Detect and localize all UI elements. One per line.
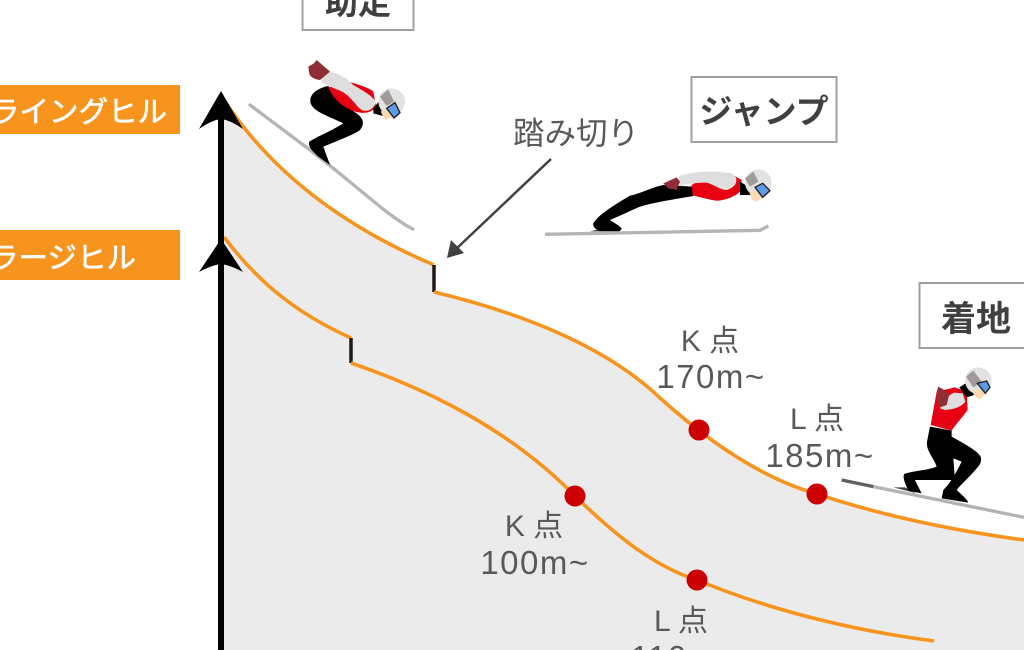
L point marker: flying hill bbox=[765, 403, 875, 504]
K point marker: large hill: 100m~ bbox=[480, 544, 590, 581]
K point marker: flying hill: K 点 bbox=[681, 325, 739, 358]
heading: in-run bbox=[302, 0, 414, 30]
skier: flight posture bbox=[545, 169, 772, 234]
hill profile fill bbox=[224, 100, 1024, 650]
callout: take-off point with arrow bbox=[447, 115, 639, 258]
heading: landing: 着地 bbox=[941, 300, 1011, 339]
callout: take-off point with arrow: 踏み切り bbox=[513, 115, 639, 151]
K point marker: flying hill: 170m~ bbox=[656, 358, 766, 395]
skier: landing posture bbox=[842, 367, 1024, 517]
heading: jump: ジャンプ bbox=[699, 93, 829, 130]
skier: in-run crouch bbox=[250, 60, 413, 229]
heading: jump bbox=[692, 77, 836, 142]
K point marker: large hill: K 点 bbox=[505, 510, 563, 543]
large hill profile bbox=[224, 237, 934, 641]
heading: landing bbox=[920, 283, 1024, 348]
label: flying hill bbox=[0, 85, 180, 134]
L point marker: flying hill: L 点 bbox=[790, 403, 844, 436]
K point marker: flying hill bbox=[656, 325, 766, 440]
L point marker: large hill bbox=[631, 570, 737, 650]
height axis with arrowheads bbox=[199, 91, 243, 650]
K point marker: large hill bbox=[480, 486, 590, 581]
L point marker: large hill: L 点 bbox=[654, 605, 708, 638]
label: large hill bbox=[0, 230, 180, 280]
flying hill profile bbox=[224, 100, 1024, 540]
L point marker: flying hill: 185m~ bbox=[765, 437, 875, 474]
